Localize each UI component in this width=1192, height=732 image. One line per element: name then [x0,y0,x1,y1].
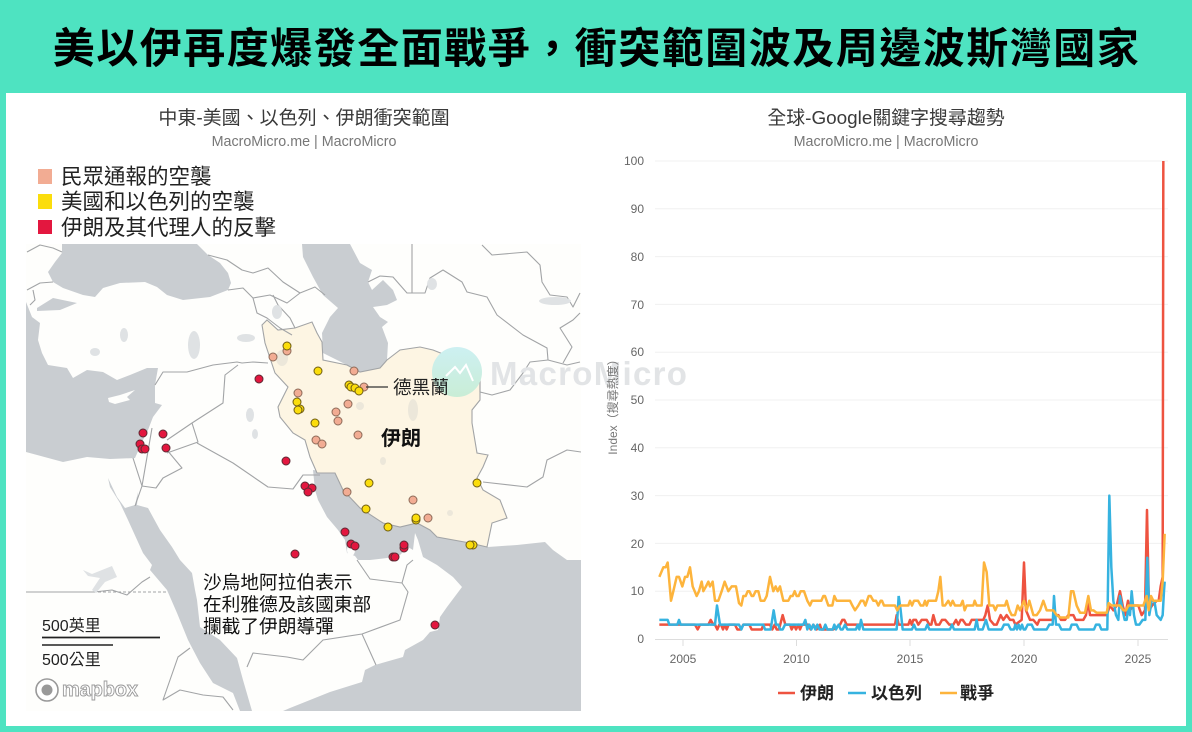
y axis labels: 40 [631,441,644,455]
y axis labels: 90 [631,202,644,216]
legend text: citizen reports: 民眾通報的空襲 [61,165,212,189]
line: war series [659,534,1165,617]
y axis labels: 100 [624,154,644,168]
Tehran leader line [366,386,388,388]
map source: MacroMicro.me | MacroMicro [212,134,396,150]
y axis labels: 20 [631,537,644,551]
title: 美以伊再度爆發全面戰爭，衝突範圍波及周邊波斯灣國家 [53,25,1140,72]
water: Black Sea [48,244,231,300]
panel: conflict map [26,107,688,711]
mapbox logo: mapbox [62,679,138,701]
scale bar: 500英里 [42,617,101,635]
watermark mountain icon [446,365,473,381]
y axis labels: 50 [631,393,644,407]
legend swatch: US and Israel [38,194,52,209]
island: Qatar [347,547,355,556]
water: Red Sea [108,478,252,711]
scale bar: 500公里 [42,651,101,669]
legend swatch: Iran [38,220,52,234]
map heading: 中東-美國、以色列、伊朗衝突範圍 [158,107,450,129]
water: Persian Gulf and Arabian Sea [283,470,581,711]
y axis labels: 10 [631,584,644,598]
panel: Google search trend chart [605,107,1168,703]
line: Iran series [659,161,1163,629]
scale bar [42,617,160,669]
y axis labels: 80 [631,250,644,264]
legend key: Iran [778,692,795,694]
y axis labels: 70 [631,298,644,312]
map base [26,244,581,711]
annotation: Saudi interceptions: 攔截了伊朗導彈 [203,616,334,637]
water: Sea of Marmara [37,298,77,311]
x axis labels: 2015 [897,652,924,666]
line: Israel series [659,496,1165,629]
annotation: Saudi interceptions: 沙烏地阿拉伯表示 [203,572,352,593]
legend label: Iran: 伊朗 [800,684,834,703]
y axis labels [624,154,644,646]
legend label: Israel: 以色列 [871,683,922,703]
island: Cyprus [108,390,135,404]
y axis labels: 0 [637,632,644,646]
land: Iran [262,320,507,547]
watermark emblem [432,347,482,397]
x axis labels: 2005 [670,652,697,666]
y axis gridlines [655,161,1168,591]
x axis labels: 2010 [783,652,810,666]
x axis labels: 2025 [1125,652,1152,666]
x axis labels: 2020 [1011,652,1038,666]
water: Mediterranean [26,302,162,462]
y axis labels: 60 [631,345,644,359]
label: Iran: 伊朗 [381,427,421,450]
dots: US and Israeli airstrikes [283,342,481,549]
watermark wordmark: MacroMicro [490,355,688,392]
chart source: MacroMicro.me | MacroMicro [794,134,978,150]
legend: strike types [38,165,276,240]
national borders [26,244,581,710]
legend text: Iran: 伊朗及其代理人的反擊 [61,216,276,240]
legend text: US and Israel: 美國和以色列的空襲 [61,190,255,214]
annotation: Saudi interceptions [203,572,371,637]
x axis labels [670,652,1152,666]
dots: Iranian and proxy counterattacks [136,375,439,629]
inland lakes and rivers [83,278,571,593]
legend key: Israel [848,692,866,694]
chart legend [778,683,994,703]
x axis line and ticks [655,639,1168,646]
water: Caspian Sea [302,244,397,373]
Iranian inland salt lakes [276,350,453,516]
chart heading: 全球-Google關鍵字搜尋趨勢 [767,107,1005,129]
legend key: war [940,692,957,694]
dots: citizen-reported airstrikes [269,347,432,522]
legend swatch: citizen reports [38,169,52,184]
y axis labels: 30 [631,489,644,503]
MacroMicro watermark [432,347,688,397]
y axis title: Index（搜尋熱度） [605,353,620,455]
annotation: Saudi interceptions: 在利雅德及該國東部 [203,594,371,615]
legend label: war: 戰爭 [960,683,994,703]
label: Tehran: 德黑蘭 [393,377,449,398]
